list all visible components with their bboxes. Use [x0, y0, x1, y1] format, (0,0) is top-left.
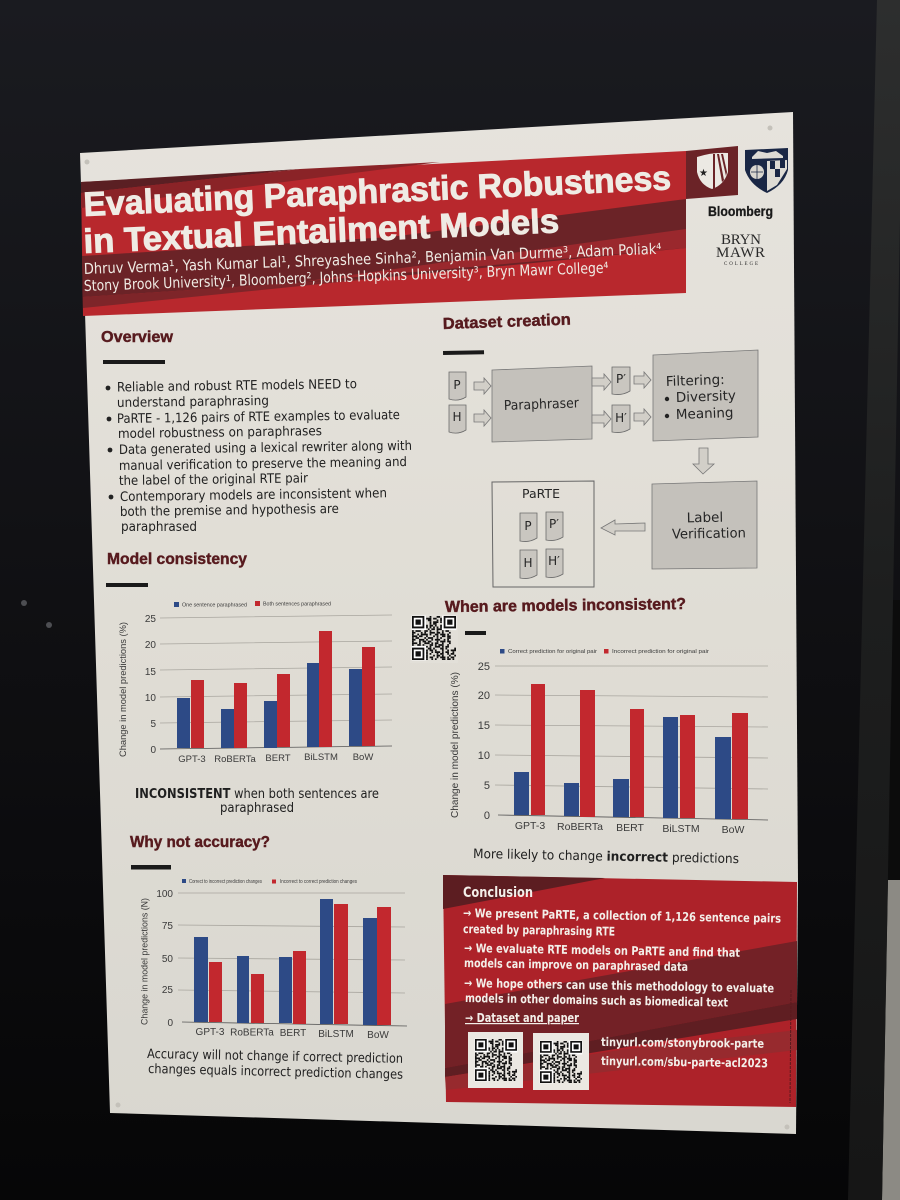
bar chart: prediction changes: RoBERTa [230, 1028, 274, 1038]
logo: Bryn Mawr College: BRYN [721, 232, 761, 248]
conclusion text: models in other domains such as biomedical text [465, 991, 728, 1010]
bar chart: when inconsistent: 25 [478, 661, 490, 673]
overview bullet list: Contemporary models are inconsistent when [120, 486, 387, 505]
bar chart: model consistency: Change in model predictions (%) [118, 622, 129, 757]
filtering box [653, 350, 758, 441]
logo: Stony Brook shield [697, 153, 728, 189]
bar chart: when inconsistent: Incorrect prediction for original pair [612, 649, 709, 655]
overview bullet list: Reliable and robust RTE models NEED to [117, 377, 357, 395]
conclusion text: → We present PaRTE, a collection of 1,126 sentence pairs [463, 906, 781, 926]
bar chart: when inconsistent [449, 649, 768, 836]
pins at poster corners [84, 126, 790, 1130]
logo: Bryn Mawr College: COLLEGE [724, 262, 758, 267]
panel: conclusion [443, 875, 797, 1107]
qr code: dataset [468, 1032, 523, 1088]
title: in Textual Entailment Models [83, 202, 560, 261]
panel: overview [101, 329, 412, 535]
paraphrased documents: P′ [616, 372, 626, 386]
arrows into filtering [634, 372, 651, 425]
input documents [449, 372, 466, 433]
bar chart: model consistency: 5 [150, 719, 156, 730]
bar chart: when inconsistent: 10 [478, 750, 490, 762]
bar chart: when inconsistent: 15 [478, 720, 490, 732]
bar chart: model consistency: BoW [353, 752, 373, 763]
caption: inconsistent: INCONSISTENT when both sentences are [135, 787, 379, 802]
panel: why not accuracy [130, 834, 407, 1083]
conclusion text: created by paraphrasing RTE [463, 922, 615, 939]
arrows out of paraphraser [592, 374, 611, 427]
dataset and paper links: tinyurl.com/stonybrook-parte [601, 1035, 764, 1051]
overview bullet list: model robustness on paraphrases [118, 424, 322, 442]
caption: accuracy: changes equals incorrect prediction changes [148, 1062, 403, 1083]
overview bullet list [106, 377, 412, 535]
caption: inconsistent: paraphrased [220, 801, 294, 816]
conclusion text [463, 906, 781, 1025]
bar chart: when inconsistent: Change in model predictions (%) [449, 672, 461, 818]
conclusion text: → We hope others can use this methodology to evaluate [464, 976, 774, 995]
conclusion text: → We evaluate RTE models on PaRTE and find that [464, 941, 740, 960]
parte box [492, 481, 594, 587]
poster sheet [80, 112, 798, 1134]
arrows into paraphraser [474, 378, 491, 426]
conclusion text: models can improve on paraphrased data [464, 956, 688, 974]
bar chart: prediction changes: Incorrect to correct prediction changes [280, 879, 357, 885]
dataset and paper links: tinyurl.com/sbu-parte-acl2023 [601, 1054, 768, 1070]
conclusion heading: Conclusion [463, 885, 533, 901]
bar chart: prediction changes: BiLSTM [318, 1029, 354, 1040]
parte box: P [524, 519, 532, 533]
qr code: poster link [410, 614, 458, 663]
heading: dataset creation: Dataset creation [443, 312, 571, 333]
bar chart: prediction changes: Correct to incorrect prediction changes [189, 879, 262, 885]
bar chart: when inconsistent: 0 [484, 810, 490, 822]
paraphraser box [492, 366, 592, 442]
bar chart: model consistency: One sentence paraphrased [182, 602, 247, 608]
bar chart: prediction changes: GPT-3 [196, 1027, 225, 1038]
overview bullet list: manual verification to preserve the meaning and [119, 455, 407, 474]
bar chart: when inconsistent: 20 [478, 690, 490, 702]
header banner [81, 146, 738, 316]
caption: more likely: More likely to change incorrect predictions [473, 847, 739, 867]
arrow left to parte [601, 520, 645, 535]
parte box: H [523, 556, 533, 570]
logo: Bloomberg: Bloomberg [708, 203, 773, 219]
overview bullet list: understand paraphrasing [117, 394, 269, 411]
caption: accuracy [147, 1047, 403, 1083]
heading: why not accuracy: Why not accuracy? [130, 834, 270, 851]
qr code: paper [533, 1033, 589, 1090]
paraphrased documents [612, 367, 630, 433]
authors and affiliations: Dhruv Verma¹, Yash Kumar Lal¹, Shreyashee Sinha², Benjamin Van Durme³, Adam Poliak⁴ [84, 240, 662, 278]
authors and affiliations: Stony Brook University¹, Bloomberg², Johns Hopkins University³, Bryn Mawr College⁴ [84, 259, 609, 295]
heading: model consistency: Model consistency [107, 551, 247, 568]
bar chart: when inconsistent: GPT-3 [515, 820, 545, 832]
overview bullet list: paraphrased [121, 520, 197, 535]
caption: inconsistent [135, 787, 379, 816]
bar chart: prediction changes: 75 [162, 921, 173, 932]
bar chart: model consistency: 20 [145, 640, 156, 651]
filtering box: Diversity [676, 388, 736, 406]
heading: overview: Overview [101, 329, 174, 346]
label verification box [652, 481, 757, 569]
bar chart: model consistency: BERT [265, 753, 291, 764]
bar chart: model consistency: BiLSTM [304, 752, 338, 763]
parte box: H′ [548, 554, 560, 568]
bar chart: prediction changes: 50 [162, 954, 173, 965]
bar chart: when inconsistent: Correct prediction for original pair [508, 649, 597, 655]
logo: Bryn Mawr College [716, 232, 765, 267]
bar chart: prediction changes: Change in model predictions (N) [140, 898, 150, 1025]
input documents: P [453, 378, 461, 392]
parte box: PaRTE [522, 486, 560, 501]
bar chart: prediction changes: BoW [367, 1030, 389, 1041]
title: Evaluating Paraphrastic Robustness [83, 159, 672, 224]
bar chart: model consistency [118, 601, 392, 765]
bar chart: prediction changes [140, 879, 407, 1041]
input documents: H [452, 410, 462, 424]
label verification box: Verification [672, 525, 746, 543]
bar chart: model consistency: RoBERTa [214, 754, 256, 765]
bar chart: model consistency: Both sentences paraphrased [263, 602, 331, 608]
logo: Bryn Mawr College: MAWR [716, 245, 765, 261]
bar chart: prediction changes: 100 [156, 889, 173, 900]
bar chart: model consistency: 10 [145, 693, 156, 704]
overview bullet list: PaRTE - 1,126 pairs of RTE examples to evaluate [117, 408, 400, 427]
paraphraser box: Paraphraser [504, 395, 580, 414]
bar chart: when inconsistent: RoBERTa [557, 821, 603, 833]
title [83, 159, 672, 261]
parte box: P′ [549, 517, 559, 531]
panel: dataset creation [443, 312, 758, 587]
label verification box: Label [687, 510, 723, 526]
bar chart: prediction changes: 25 [162, 985, 173, 996]
logo: Stony Brook shield: ★ [699, 168, 708, 179]
bar chart: prediction changes: 0 [167, 1018, 173, 1029]
conclusion text: → Dataset and paper [465, 1011, 579, 1025]
heading: when are models inconsistent: When are models inconsistent? [445, 596, 686, 616]
bar chart: when inconsistent: BiLSTM [662, 823, 700, 835]
overview bullet list: Data generated using a lexical rewriter along with [119, 439, 412, 458]
overview bullet list: both the premise and hypothesis are [120, 502, 339, 520]
bar chart: model consistency: 25 [145, 614, 156, 625]
caption: accuracy: Accuracy will not change if correct prediction [147, 1047, 403, 1067]
filtering box: Meaning [676, 405, 734, 423]
dataset and paper links [601, 1035, 768, 1070]
authors and affiliations [84, 240, 662, 295]
panel: when are models inconsistent [410, 596, 768, 867]
logo: Johns Hopkins shield [745, 148, 788, 193]
bar chart: model consistency: GPT-3 [178, 754, 206, 765]
bar chart: when inconsistent: BERT [616, 822, 644, 834]
flow diagram [449, 350, 758, 587]
bar chart: prediction changes: BERT [280, 1028, 306, 1039]
paraphrased documents: H′ [615, 411, 627, 425]
filtering box: Filtering: [666, 372, 725, 390]
overview bullet list: the label of the original RTE pair [119, 471, 309, 489]
panel: model consistency [106, 551, 392, 816]
bar chart: model consistency: 15 [145, 667, 156, 678]
bar chart: model consistency: 0 [150, 745, 156, 756]
arrow down to label verification [693, 448, 714, 474]
bar chart: when inconsistent: BoW [722, 824, 744, 836]
bar chart: when inconsistent: 5 [484, 780, 490, 792]
